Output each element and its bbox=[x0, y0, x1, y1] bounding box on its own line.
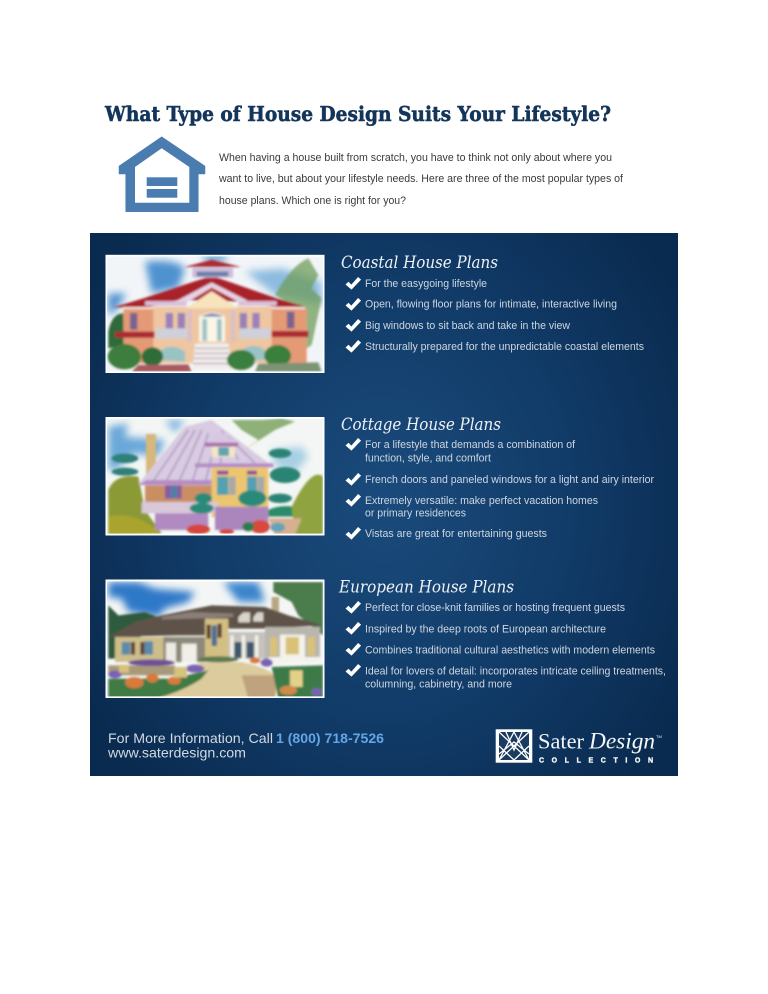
logo: Sater Design Collection: TM bbox=[656, 734, 662, 739]
list: european features bbox=[346, 601, 666, 690]
logo: Sater Design Collection: COLLECTION bbox=[539, 758, 653, 765]
list: coastal features bbox=[346, 277, 644, 353]
list: coastal features: Big windows to sit back and take in the view bbox=[365, 320, 570, 332]
illustration: european house bbox=[106, 580, 324, 699]
illustration: cottage house bbox=[106, 417, 324, 536]
logo: Sater Design Collection: Sater bbox=[538, 728, 585, 754]
logo: Sater Design Collection bbox=[496, 728, 662, 765]
list: cottage features bbox=[346, 438, 654, 540]
panel: house plans bbox=[90, 233, 678, 776]
list: european features: Ideal for lovers of detail: incorporates intricate ceiling treatments, bbox=[365, 666, 666, 678]
list: coastal features: Open, flowing floor plans for intimate, interactive living bbox=[365, 298, 617, 310]
heading: european: European House Plans bbox=[338, 578, 514, 598]
list: european features: Perfect for close-knit families or hosting frequent guests bbox=[365, 602, 625, 614]
list: european features: Combines traditional cultural aesthetics with modern elements bbox=[365, 644, 655, 656]
intro text bbox=[218, 152, 623, 207]
icon: house bbox=[119, 137, 205, 212]
contact information bbox=[107, 730, 384, 760]
illustration: coastal house bbox=[106, 255, 324, 373]
contact information: www.saterdesign.com bbox=[107, 744, 246, 760]
intro text: When having a house built from scratch, you have to think not only about where you bbox=[219, 152, 612, 164]
intro text: house plans. Which one is right for you? bbox=[219, 195, 406, 207]
contact information: 1 (800) 718-7526 bbox=[276, 730, 384, 746]
list: cottage features: French doors and paneled windows for a light and airy interior bbox=[365, 474, 654, 486]
heading: cottage: Cottage House Plans bbox=[341, 415, 501, 435]
title: What Type of House Design Suits Your Lifestyle? bbox=[104, 102, 611, 126]
list: coastal features: For the easygoing lifestyle bbox=[365, 278, 487, 290]
logo: Sater Design Collection: Design bbox=[588, 728, 655, 754]
list: european features: Inspired by the deep roots of European architecture bbox=[365, 624, 606, 636]
intro text: want to live, but about your lifestyle needs. Here are three of the most popular types of bbox=[218, 173, 623, 185]
list: cottage features: Vistas are great for entertaining guests bbox=[365, 528, 547, 540]
contact information: For More Information, Call bbox=[108, 730, 273, 746]
list: coastal features: Structurally prepared for the unpredictable coastal elements bbox=[365, 341, 644, 353]
heading: coastal: Coastal House Plans bbox=[341, 253, 498, 273]
list: cottage features: or primary residences bbox=[365, 508, 466, 520]
list: cottage features: For a lifestyle that demands a combination of bbox=[365, 439, 575, 451]
list: cottage features: Extremely versatile: make perfect vacation homes bbox=[365, 495, 598, 507]
list: european features: columning, cabinetry, and more bbox=[365, 678, 512, 690]
list: cottage features: function, style, and comfort bbox=[365, 452, 491, 464]
